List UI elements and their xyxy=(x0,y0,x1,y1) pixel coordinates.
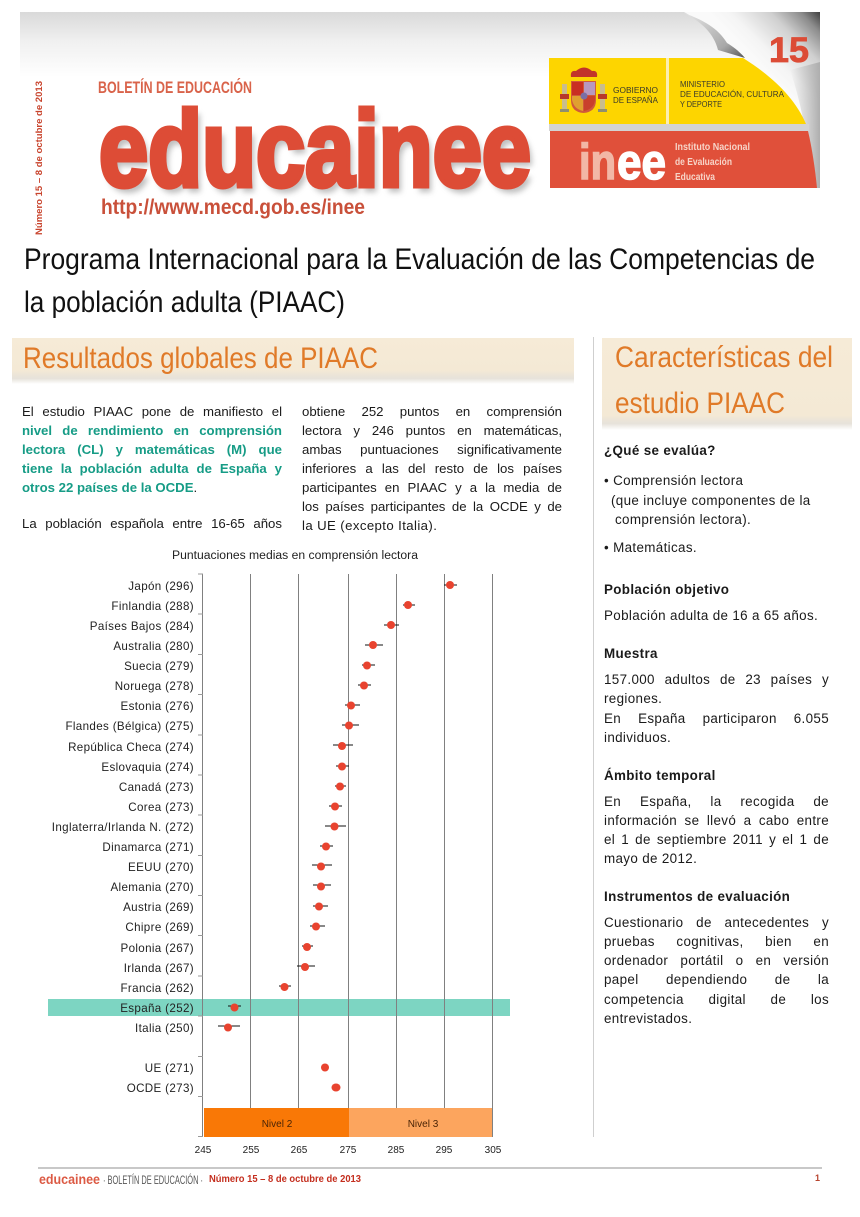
x axis labels xyxy=(195,1145,502,1156)
text block: intro right column: ambas puntuaciones significativamente xyxy=(302,442,562,457)
section heading: Resultados globales xyxy=(12,338,574,384)
inee wordmark: in xyxy=(579,134,616,190)
grid lines xyxy=(198,574,492,1137)
government text: GOBIERNO xyxy=(613,86,658,95)
¿Qué se evalúa?: • Matemáticas. xyxy=(604,540,697,555)
vertical issue date: Número 15 – 8 de octubre de 2013 xyxy=(34,81,45,235)
logo shadow: educainee xyxy=(103,94,535,215)
Instrumentos de evaluación: pruebas cognitivas, bien en xyxy=(604,934,829,949)
Muestra: individuos. xyxy=(604,730,671,745)
sidebar: características del estudio xyxy=(604,443,829,1026)
inee wordmark: ee xyxy=(617,134,666,190)
header gradient band xyxy=(20,12,820,77)
text block: intro left column: nivel de rendimiento en comprensión xyxy=(22,423,282,438)
institute text xyxy=(675,141,750,183)
country labels: Países Bajos (284) xyxy=(90,620,194,633)
country labels: EEUU (270) xyxy=(128,861,194,874)
ministry text: DE EDUCACIÓN, CULTURA xyxy=(680,90,785,99)
country labels: Noruega (278) xyxy=(115,680,194,693)
text block: intro left column: La población española entre 16-65 años xyxy=(22,516,282,531)
x axis labels: 255 xyxy=(243,1145,260,1156)
level bands xyxy=(204,1108,492,1137)
¿Qué se evalúa?: ¿Qué se evalúa? xyxy=(604,443,716,458)
Muestra xyxy=(604,646,829,745)
x axis labels: 275 xyxy=(340,1145,357,1156)
Instrumentos de evaluación: ordenador portátil o en versión xyxy=(604,953,829,968)
Nivel 3 band xyxy=(349,1108,492,1137)
Población objetivo: Población objetivo xyxy=(604,582,729,597)
text block: intro left column: otros 22 países de la OCDE. xyxy=(22,480,197,495)
Ámbito temporal: el 1 de septiembre 2011 y el 1 de xyxy=(604,832,829,847)
Instrumentos de evaluación: competencia digital de los xyxy=(604,992,829,1007)
country labels: Finlandia (288) xyxy=(111,600,194,613)
institute text: de Evaluación xyxy=(675,156,732,168)
country labels: UE (271) xyxy=(145,1062,194,1075)
Muestra: 157.000 adultos de 23 países y xyxy=(604,672,829,687)
country labels: Australia (280) xyxy=(113,640,194,653)
Ámbito temporal: En España, la recogida de xyxy=(604,794,829,809)
text block: intro left column: lectora (CL) y matemáticas (M) que xyxy=(22,442,282,457)
country labels: Corea (273) xyxy=(128,801,194,814)
country labels: Francia (262) xyxy=(120,982,194,995)
country labels: OCDE (273) xyxy=(127,1082,194,1095)
text block: intro right column: los países participantes de la OCDE y de xyxy=(302,499,562,514)
footer bulletin label: · BOLETÍN DE EDUCACIÓN · xyxy=(103,1172,203,1187)
country labels: Canadá (273) xyxy=(119,781,194,794)
Ámbito temporal xyxy=(604,768,829,866)
text block: intro left column: El estudio PIAAC pone de manifiesto el xyxy=(22,404,282,419)
main title xyxy=(24,243,815,319)
country labels: Irlanda (267) xyxy=(124,962,194,975)
page number: 1 xyxy=(815,1173,820,1183)
Instrumentos de evaluación: Instrumentos de evaluación xyxy=(604,889,790,904)
data points xyxy=(224,581,454,1092)
institute text: Educativa xyxy=(675,171,715,183)
country labels: Inglaterra/Irlanda N. (272) xyxy=(52,821,194,834)
section heading: Resultados globales: Resultados globales de PIAAC xyxy=(23,342,378,375)
¿Qué se evalúa? xyxy=(604,443,811,555)
section heading: Características xyxy=(602,338,852,430)
government text xyxy=(613,86,659,105)
header banner xyxy=(20,12,820,235)
x axis labels: 245 xyxy=(195,1145,212,1156)
country labels: Estonia (276) xyxy=(120,700,194,713)
Instrumentos de evaluación: entrevistados. xyxy=(604,1011,692,1026)
highlight band: España xyxy=(48,999,510,1016)
text block: intro right column: obtiene 252 puntos en comprensión xyxy=(302,404,562,419)
Nivel 2 band xyxy=(204,1108,349,1137)
inee wordmark xyxy=(579,134,666,190)
x axis labels: 265 xyxy=(291,1145,308,1156)
country labels: Flandes (Bélgica) (275) xyxy=(65,720,194,733)
country labels: República Checa (274) xyxy=(68,741,194,754)
url: http://www.mecd.gob.es/inee xyxy=(101,196,365,219)
main title: la población adulta (PIAAC) xyxy=(24,286,345,319)
government text: DE ESPAÑA xyxy=(613,96,659,105)
text block: intro right column: la UE (excepto Italia). xyxy=(302,518,437,533)
Nivel 2 band: Nivel 2 xyxy=(262,1119,293,1130)
text block: intro right column: participantes en PIAAC y a la media de xyxy=(302,480,562,495)
Muestra: En España participaron 6.055 xyxy=(604,711,829,726)
x axis labels: 295 xyxy=(436,1145,453,1156)
Muestra: Muestra xyxy=(604,646,658,661)
Población objetivo: Población adulta de 16 a 65 años. xyxy=(604,608,818,623)
Instrumentos de evaluación: Cuestionario de antecedentes y xyxy=(604,915,829,930)
Ámbito temporal: mayo de 2012. xyxy=(604,851,697,866)
bulletin label: BOLETÍN DE EDUCACIÓN xyxy=(98,78,252,97)
inee logo: red box xyxy=(550,131,817,190)
country labels: Dinamarca (271) xyxy=(102,841,194,854)
text block: intro right column: inferiores a las del resto de los países xyxy=(302,461,562,476)
country labels: Japón (296) xyxy=(128,580,194,593)
Ámbito temporal: información se llevó a cabo entre xyxy=(604,813,829,828)
ministry text: Y DEPORTE xyxy=(680,100,722,109)
country labels: Suecia (279) xyxy=(124,660,194,673)
Instrumentos de evaluación xyxy=(604,889,829,1026)
country labels: Chipre (269) xyxy=(125,921,194,934)
x axis labels: 305 xyxy=(485,1145,502,1156)
ministry text xyxy=(680,80,785,109)
government logo: yellow box xyxy=(549,58,809,131)
error bars xyxy=(218,585,457,1026)
country labels: Austria (269) xyxy=(123,901,194,914)
Nivel 3 band: Nivel 3 xyxy=(408,1119,439,1130)
text block: intro right column: lectora y 246 puntos en matemáticas, xyxy=(302,423,562,438)
country labels: Polonia (267) xyxy=(120,942,194,955)
chart title: Puntuaciones medias en comprensión lectora xyxy=(172,550,419,562)
Ámbito temporal: Ámbito temporal xyxy=(604,768,716,783)
institute text: Instituto Nacional xyxy=(675,141,750,153)
¿Qué se evalúa?: (que incluye componentes de la xyxy=(611,493,811,508)
¿Qué se evalúa?: comprensión lectora). xyxy=(615,512,751,527)
x axis labels: 285 xyxy=(388,1145,405,1156)
text block: intro left column xyxy=(22,404,282,531)
¿Qué se evalúa?: • Comprensión lectora xyxy=(604,473,743,488)
text block: intro left column: tiene la población adulta de España y xyxy=(22,461,282,476)
page curl xyxy=(684,12,820,188)
country labels: Italia (250) xyxy=(135,1022,194,1035)
section heading: Características: estudio PIAAC xyxy=(615,387,785,420)
Instrumentos de evaluación: papel dependiendo de la xyxy=(604,972,829,987)
icon: coat of arms xyxy=(560,68,607,113)
country labels: España (252) xyxy=(120,1002,194,1015)
ministry text: MINISTERIO xyxy=(680,80,725,89)
country labels: Eslovaquia (274) xyxy=(101,761,194,774)
Muestra: regiones. xyxy=(604,691,662,706)
issue number: 15 xyxy=(769,31,809,70)
Población objetivo xyxy=(604,582,818,623)
country labels xyxy=(52,580,194,1095)
logo: educainee: educainee xyxy=(99,88,531,209)
footer logo: educainee xyxy=(39,1171,100,1187)
footer date: Número 15 – 8 de octubre de 2013 xyxy=(209,1173,361,1185)
text block: intro right column xyxy=(302,404,562,533)
column divider xyxy=(593,337,594,1137)
country labels: Alemania (270) xyxy=(110,881,194,894)
